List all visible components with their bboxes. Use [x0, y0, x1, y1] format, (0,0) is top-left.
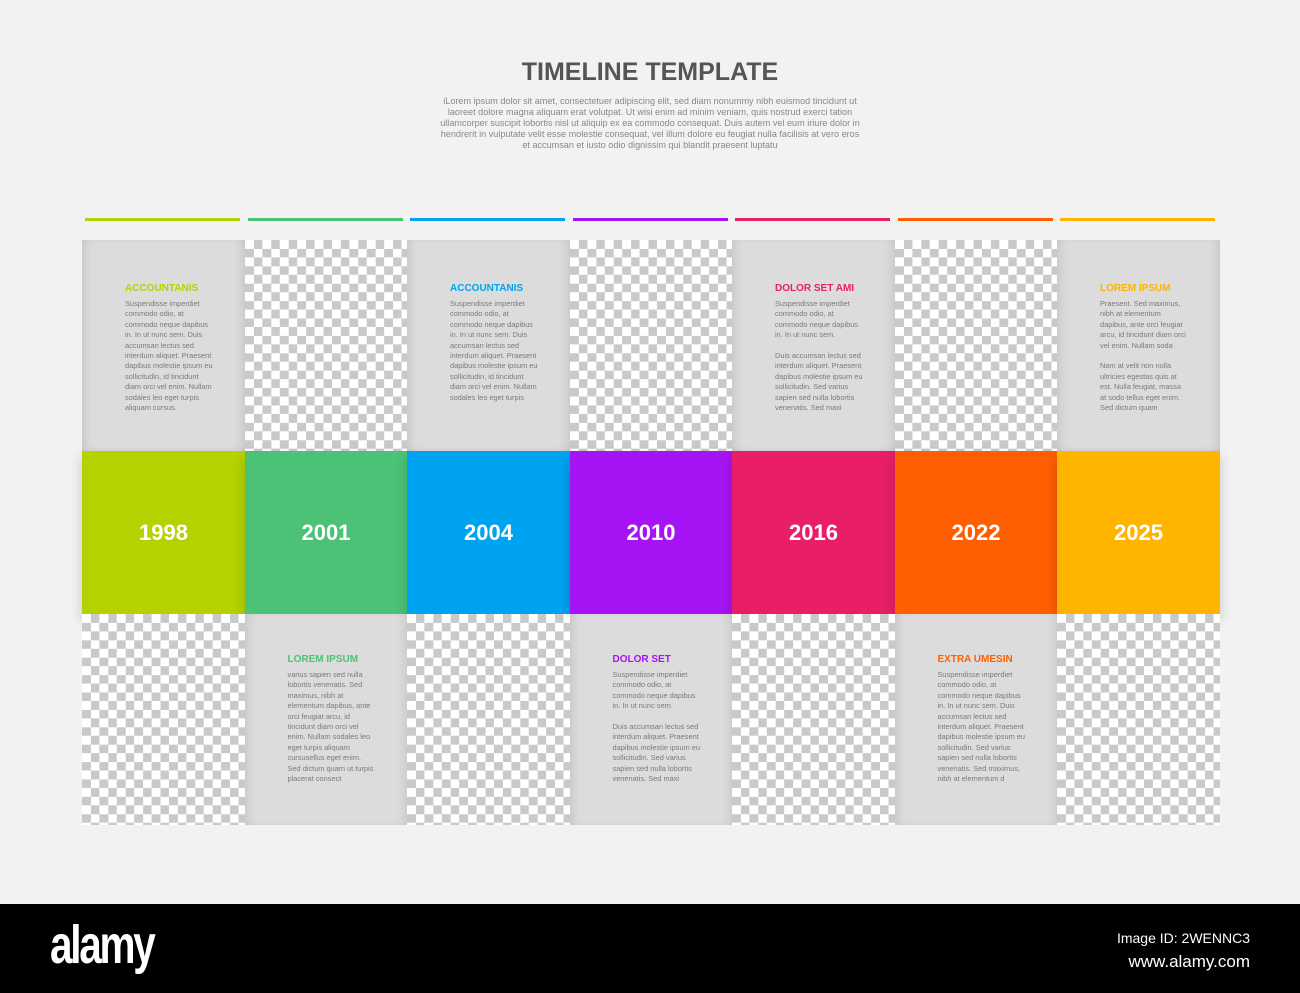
panel: lorem ipsum 2001: LOREM IPSUM	[288, 654, 358, 665]
year 2004: 2004	[464, 520, 513, 545]
image placeholder	[732, 614, 895, 825]
panel: dolor set ami 2016: Suspendisse imperdiet commodo odio, at commodo neque dapibus in. In ut nunc sem.	[775, 299, 858, 339]
panel: accountanis 2004: Suspendisse imperdiet commodo odio, at commodo neque dapibus in. In ut nunc sem. Duis accumsan lectus sed interdum aliquet. Praesent dapibus molestie ipsum eu sollicitudin, id tincidunt diam orci vel enim. Nullam sodales leo eget turpis	[450, 299, 538, 402]
image placeholder	[82, 614, 245, 825]
panel: dolor set ami 2016: DOLOR SET AMI	[775, 283, 854, 294]
panel: dolor set 2010: Duis accumsan lectus sed interdum aliquet. Praesent dapibus molestie ipsum eu sollicitudin. Sed varius sapien sed nulla lobortis venenatis. Sed maxi	[612, 722, 700, 783]
year 2004	[407, 451, 570, 614]
panel: extra umesin 2022: EXTRA UMESIN	[938, 654, 1013, 665]
image id	[1117, 930, 1250, 971]
year 2025: 2025	[1114, 520, 1163, 545]
year squares	[76, 451, 1226, 622]
year 2025	[1057, 451, 1220, 614]
year 2001	[244, 451, 408, 614]
image placeholder	[894, 240, 1058, 451]
panel: accountanis 1998	[82, 240, 245, 451]
year 2016: 2016	[789, 520, 838, 545]
year 2022	[894, 451, 1058, 614]
panel: lorem ipsum 2001	[244, 614, 408, 825]
year 1998: 1998	[139, 520, 188, 545]
panel: lorem ipsum 2025: Nam at velit non nulla ultricies egestas quis at est. Nulla feugiat, massa at sodo tellus eget enim. Sed dictum quam	[1100, 361, 1181, 412]
panel: dolor set 2010: DOLOR SET	[612, 654, 671, 665]
year 2022: 2022	[952, 520, 1000, 545]
panel: lorem ipsum 2025	[1057, 240, 1220, 451]
image id: Image ID: 2WENNC3	[1117, 930, 1250, 946]
year 1998	[82, 451, 245, 614]
panel: accountanis 2004: ACCOUNTANIS	[450, 283, 523, 294]
image placeholder	[570, 240, 732, 451]
footer bar	[0, 904, 1300, 993]
title: TIMELINE TEMPLATE	[522, 58, 778, 86]
panel: lorem ipsum 2025: Praesent. Sed maximus, nibh at elementum dapibus, ante orci feugiat arcu, id tincidunt diam orci vel enim. Nullam soda	[1100, 299, 1186, 350]
image id: www.alamy.com	[1128, 952, 1250, 971]
panel: dolor set 2010: Suspendisse imperdiet commodo odio, at commodo neque dapibus in. In ut nunc sem.	[612, 670, 696, 710]
panel: accountanis 1998: ACCOUNTANIS	[125, 283, 198, 294]
top row	[82, 240, 1220, 451]
panel: extra umesin 2022: Suspendisse imperdiet commodo odio, at commodo neque dapibus in. In ut nunc sem. Duis accumsan lectus sed interdum aliquet. Praesent dapibus molestie ipsum eu sollicitudin. Sed varius sapien sed nulla lobortis venenatis. Sed maximus, nibh at elementum d	[938, 670, 1025, 783]
image placeholder	[244, 240, 408, 451]
logo text: alamy	[50, 915, 154, 975]
panel: accountanis 2004	[407, 240, 570, 451]
year 2010: 2010	[627, 520, 675, 545]
intro text: iLorem ipsum dolor sit amet, consectetuer adipiscing elit, sed diam nonummy nibh euismod tincidunt ut laoreet dolore magna aliquam erat volutpat. Ut wisi enim ad minim veniam, quis nostrud exerci tation ullamcorper suscipit lobortis nisl ut aliquip ex ea commodo consequat. Duis autem vel eum iriure dolor in hendrerit in vulputate velit esse molestie consequat, vel illum dolore eu feugiat nulla facilisis at vero eros et accumsan et iusto odio dignissim qui blandit praesent luptatu	[440, 96, 860, 150]
year 2016	[732, 451, 895, 614]
image placeholder	[1057, 614, 1220, 825]
panel: dolor set ami 2016: Duis accumsan lectus sed interdum aliquet. Praesent dapibus molestie ipsum eu sollicitudin. Sed varius sapien sed nulla lobortis venenatis. Sed maxi	[775, 351, 863, 412]
year 2010	[570, 451, 732, 614]
panel: extra umesin 2022	[894, 614, 1058, 825]
panel: dolor set ami 2016	[732, 240, 895, 451]
panel: dolor set 2010	[570, 614, 732, 825]
panel: lorem ipsum 2025: LOREM IPSUM	[1100, 283, 1171, 294]
panel: lorem ipsum 2001: varius sapien sed nulla lobortis venenatis. Sed maximus, nibh at elementum dapibus, ante orci feugiat arcu, id tincidunt diam orci vel enim. Nullam sodales leo eget turpis aliquam cursusellus eget enim. Sed dictum quam ut turpis placerat consect	[288, 670, 373, 783]
bottom row	[82, 614, 1220, 825]
color lines	[85, 218, 1215, 221]
year 2001: 2001	[302, 520, 350, 545]
image placeholder	[407, 614, 570, 825]
panel: accountanis 1998: Suspendisse imperdiet commodo odio, at commodo neque dapibus in. In ut nunc sem. Duis accumsan lectus sed interdum aliquet. Praesent dapibus molestie ipsum eu sollicitudin, id tincidunt diam orci vel enim. Nullam sodales leo eget turpis aliquam cursus.	[125, 299, 213, 412]
